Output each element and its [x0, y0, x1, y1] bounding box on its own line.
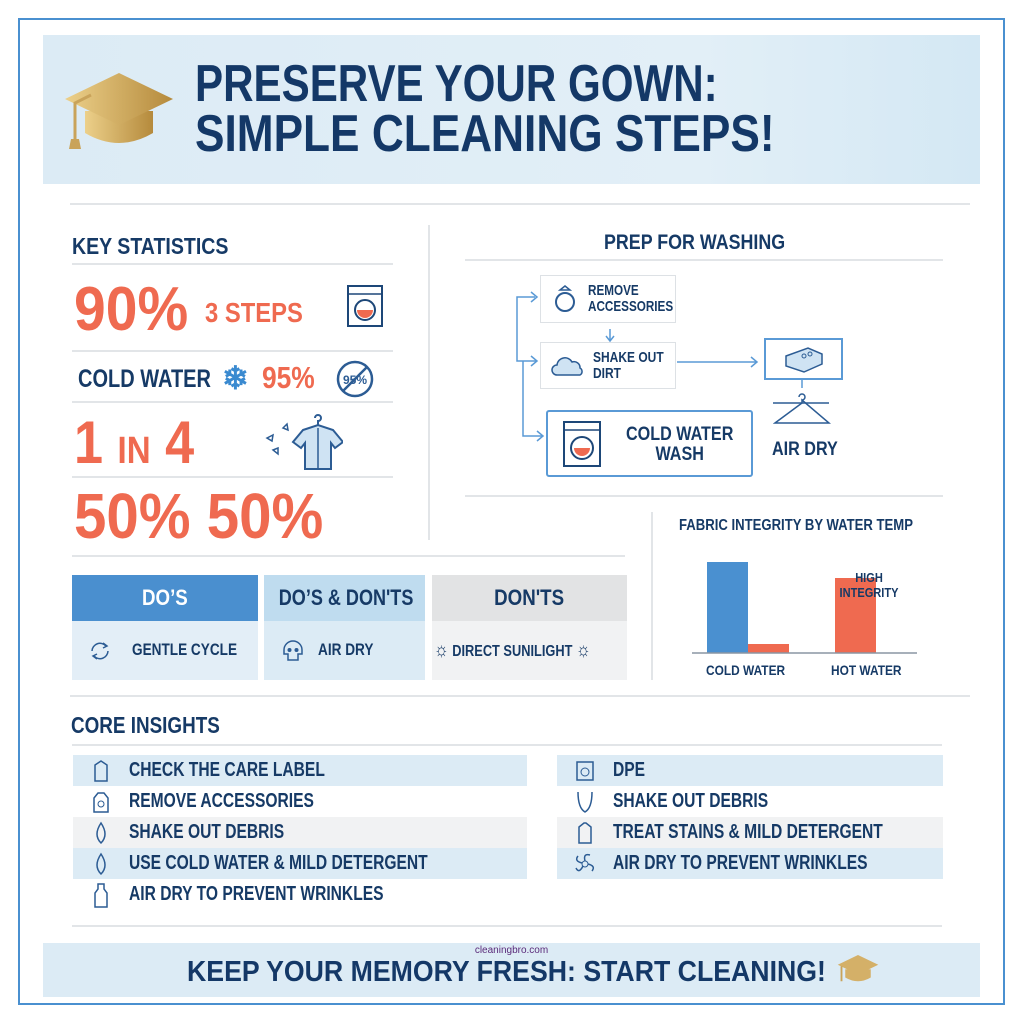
list: core insights right: [557, 755, 943, 879]
chart: fabric integrity by water temp: HOT WATER: [831, 662, 902, 678]
icon: small cap: [838, 955, 878, 982]
column: don'ts: ☼ DIRECT SUNILIGHT ☼: [434, 639, 591, 661]
box: shake out dirt: DIRT: [593, 365, 621, 382]
heading: key statistics: KEY STATISTICS: [72, 233, 228, 259]
list: core insights left: [73, 755, 527, 908]
heading: core insights: CORE INSIGHTS: [71, 712, 220, 738]
label: air dry: AIR DRY: [772, 439, 838, 460]
panel: prep for washing flowchart: [465, 231, 943, 477]
table: do's and don'ts: [72, 575, 627, 680]
box: shake out dirt: [540, 342, 676, 389]
box: shake out dirt: SHAKE OUT: [593, 349, 664, 366]
title: [195, 55, 775, 163]
stat: 90%: 90%: [74, 275, 188, 344]
panel: key statistics: [72, 233, 393, 552]
box: remove accessories: [540, 275, 676, 323]
stat: cold water: COLD WATER: [78, 365, 211, 393]
box: sponge: [764, 338, 843, 380]
arrows: connectors: [516, 292, 803, 442]
icon: graduation cap: [65, 73, 173, 149]
stat: 50% 50%: 50% 50%: [74, 480, 323, 552]
axis labels: COLD WATER: [706, 662, 785, 678]
icon: crossed 95%: [336, 360, 374, 398]
list: core insights left: AIR DRY TO PREVENT WRINKLES: [129, 883, 384, 905]
box: cold water wash: WASH: [655, 444, 704, 465]
box: remove accessories: REMOVE: [588, 282, 639, 299]
title: PRESERVE YOUR GOWN:: [195, 55, 718, 113]
stat: 95%: 95%: [262, 360, 315, 395]
icon: washing machine: [347, 285, 383, 327]
bars: [692, 562, 917, 654]
icon: snowflake: ❄: [222, 360, 249, 396]
footer banner: [43, 943, 980, 997]
watermark: cleaningbro.com: [475, 945, 548, 956]
column: do's: GENTLE CYCLE: [132, 640, 237, 659]
list: core insights right: DPE: [613, 759, 645, 781]
box: cold water wash: [546, 410, 753, 477]
list: core insights left: SHAKE OUT DEBRIS: [129, 821, 284, 843]
list: core insights left: REMOVE ACCESSORIES: [129, 790, 314, 812]
icon: shirt on hanger: [266, 414, 343, 470]
chart title: FABRIC INTEGRITY BY WATER TEMP: [679, 517, 913, 534]
column: do's & don'ts: AIR DRY: [318, 640, 373, 659]
column: do's & don'ts: DO’S & DON'TS: [279, 585, 413, 610]
title: SIMPLE CLEANING STEPS!: [195, 105, 775, 163]
footer text: KEEP YOUR MEMORY FRESH: START CLEANING!: [187, 956, 826, 988]
box: remove accessories: ACCESSORIES: [588, 298, 673, 315]
list: core insights right: TREAT STAINS & MILD DETERGENT: [613, 821, 883, 843]
label: high integrity: HIGH: [855, 570, 883, 585]
stat: 3 steps: 3 STEPS: [205, 297, 303, 328]
header banner: [43, 35, 980, 184]
list: core insights left: CHECK THE CARE LABEL: [129, 759, 325, 781]
column: don'ts: [432, 575, 627, 680]
list: core insights left: USE COLD WATER & MILD DETERGENT: [129, 852, 428, 874]
box: cold water wash: COLD WATER: [626, 424, 733, 445]
heading: prep for washing: PREP FOR WASHING: [604, 231, 786, 254]
chart: fabric integrity by water temp: [679, 517, 917, 678]
icon: crossed 95%: 95%: [343, 373, 367, 387]
label: high integrity: [840, 570, 898, 600]
icon: hanger: [773, 393, 831, 424]
label: high integrity: INTEGRITY: [840, 585, 898, 600]
list: core insights right: SHAKE OUT DEBRIS: [613, 790, 768, 812]
column: do's: [72, 575, 258, 680]
column: do's: DO’S: [142, 585, 188, 610]
column: do's & don'ts: [264, 575, 425, 680]
list: core insights right: AIR DRY TO PREVENT WRINKLES: [613, 852, 868, 874]
column: don'ts: DON'TS: [495, 585, 564, 610]
stat: 1 in 4: 1 IN 4: [74, 409, 194, 476]
